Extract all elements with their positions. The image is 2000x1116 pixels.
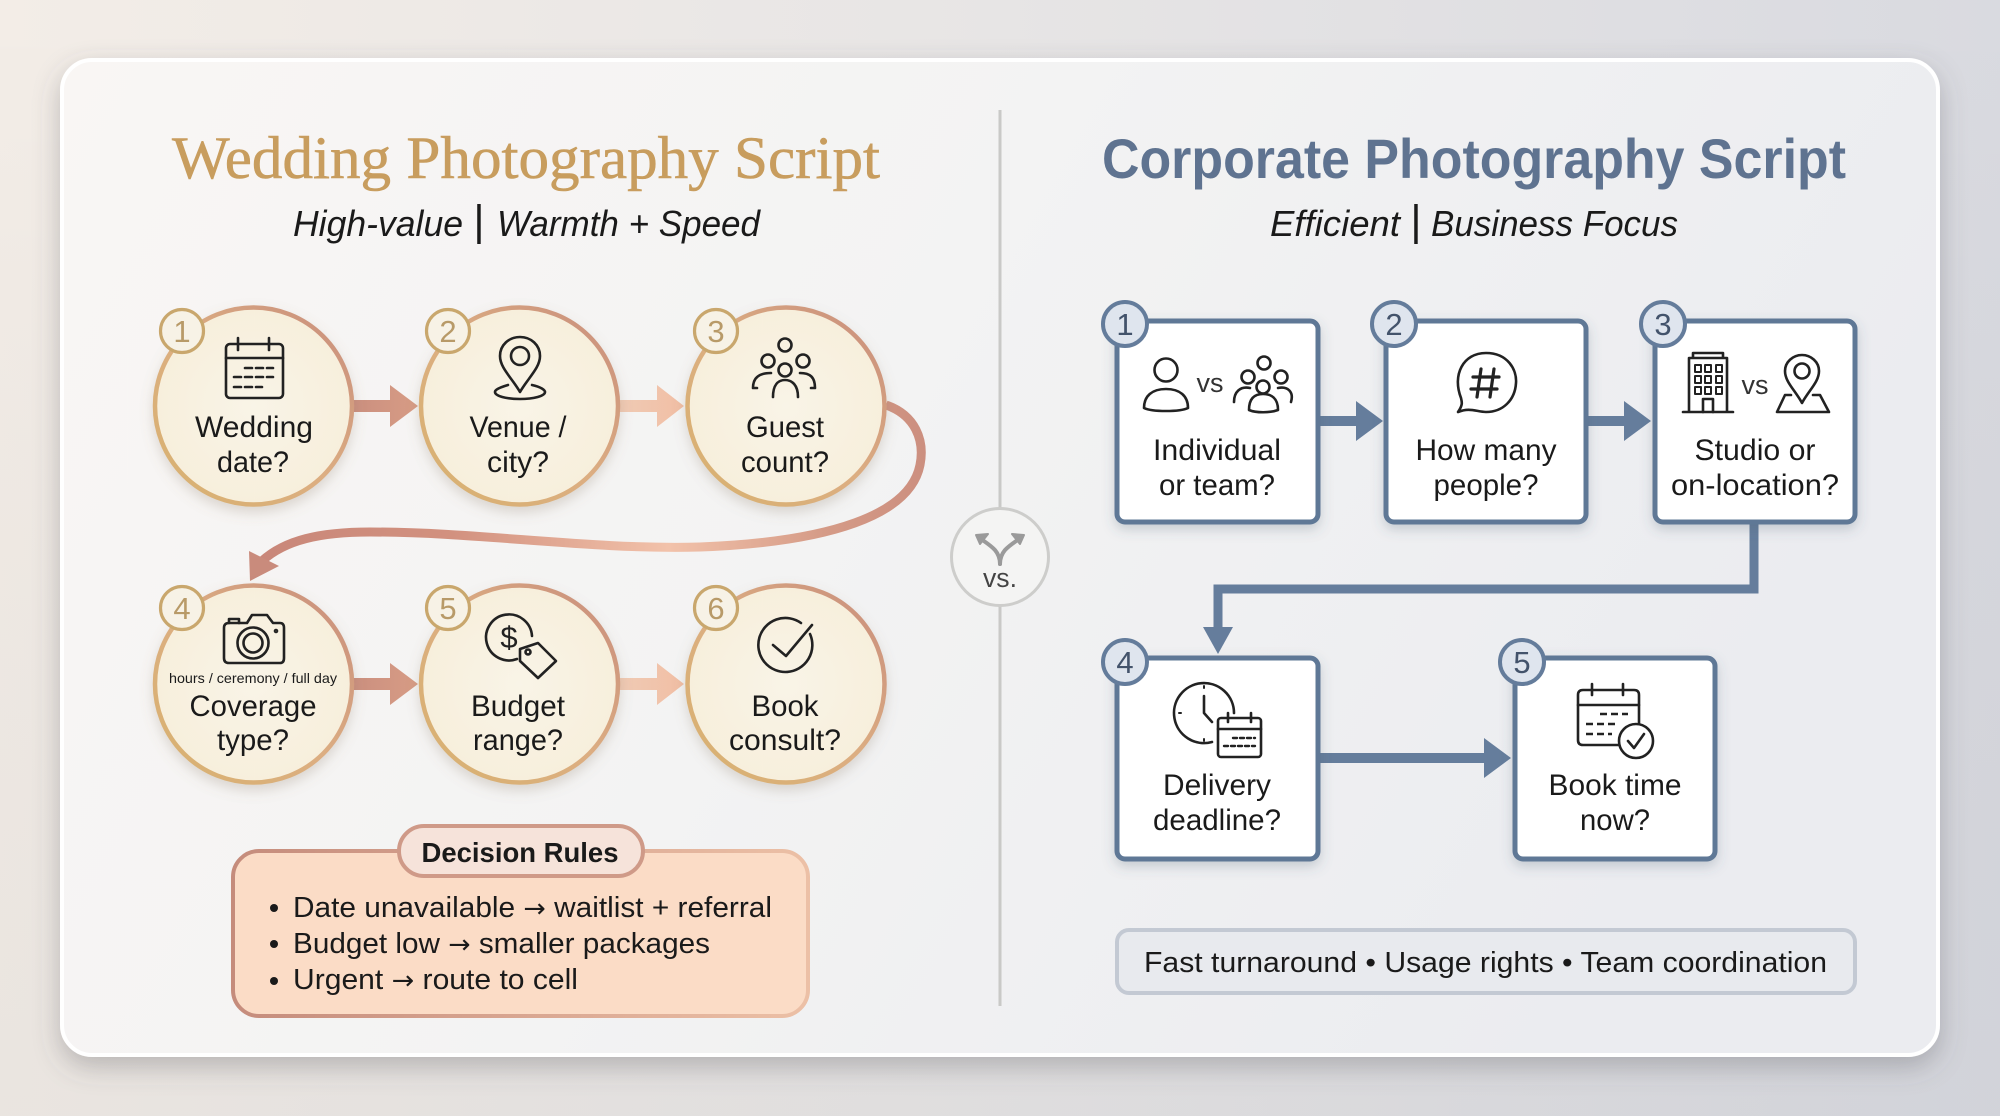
step 3: guest count: 3	[707, 314, 725, 349]
subtitle: wedding: |	[473, 197, 485, 245]
step 4: coverage type: type?	[217, 724, 289, 757]
box 4: delivery deadline: 4	[1116, 645, 1134, 680]
box 5: book time now	[1500, 640, 1715, 859]
step 6: book consult: Book	[752, 690, 819, 723]
step 3: guest count: Guest	[746, 411, 825, 444]
icon: camera	[224, 615, 284, 663]
step 2: venue: Venue /	[470, 411, 567, 444]
icon: group of people	[753, 338, 815, 397]
subtitle: corporate: Business Focus	[1431, 203, 1678, 244]
step 3: guest count	[688, 308, 884, 504]
step 6: book consult	[688, 586, 884, 782]
box 1: individual or team: or team?	[1159, 469, 1275, 502]
box 5: book time now: now?	[1580, 804, 1650, 837]
icon: calendar	[226, 338, 283, 398]
step 6: book consult: consult?	[729, 724, 841, 757]
arrow: box 2 to 3	[1587, 401, 1651, 441]
subtitle: wedding: Warmth + Speed	[497, 203, 761, 244]
box 2: how many people: 2	[1385, 307, 1403, 342]
step 1: wedding date: 1	[173, 314, 191, 349]
title: wedding: Wedding Photography Script	[172, 125, 880, 191]
title: corporate: Corporate Photography Script	[1102, 127, 1846, 190]
panel: corporate script	[1102, 127, 1855, 993]
step 4: coverage type: 4	[173, 591, 191, 626]
step 5: budget range	[421, 586, 618, 782]
arrow: step 2 to 3	[619, 385, 684, 427]
coverage note: hours / ceremony / full day	[169, 670, 337, 686]
subtitle: corporate	[1270, 197, 1678, 245]
center divider	[998, 110, 1002, 1006]
subtitle: wedding: High-value	[293, 203, 463, 244]
arrow: box 4 to 5	[1319, 738, 1511, 778]
step 1: wedding date: date?	[217, 446, 289, 479]
arrow: box 1 to 2	[1319, 401, 1383, 441]
icon: person vs team	[1144, 356, 1292, 412]
callout: decision rules	[233, 826, 808, 1016]
icon: check circle	[758, 618, 812, 672]
box 1: individual or team: Individual	[1153, 434, 1281, 467]
subtitle: corporate: Efficient	[1270, 203, 1402, 244]
box 3: studio or on-location: Studio or	[1694, 434, 1816, 467]
decision rules heading: Decision Rules	[422, 837, 618, 868]
vs badge	[952, 508, 1048, 606]
box 2: how many people: people?	[1434, 469, 1538, 502]
step 3: guest count: count?	[741, 446, 829, 479]
subtitle: wedding	[293, 197, 761, 245]
box 1: individual or team	[1103, 302, 1318, 522]
subtitle: corporate: |	[1410, 197, 1422, 245]
arrow: curved step 3 to 4	[249, 405, 921, 581]
step 4: coverage type	[155, 586, 352, 782]
arrow: step 5 to 6	[619, 663, 684, 705]
step 5: budget range: range?	[473, 724, 563, 757]
icon: calendar with check	[1578, 684, 1653, 758]
step 2: venue: 2	[439, 314, 457, 349]
arrow: step 1 to 2	[352, 385, 418, 427]
box 3: studio or on-location	[1641, 302, 1855, 522]
step 6: book consult: 6	[707, 591, 725, 626]
icon: diverging arrows	[976, 534, 1024, 564]
decision rules list: Date unavailable → waitlist + referral	[293, 892, 772, 924]
box 5: book time now: Book time	[1548, 769, 1682, 802]
icon: clock and calendar	[1174, 683, 1261, 757]
icon: dollar and tag: $	[500, 620, 518, 655]
icon: building vs map pin	[1683, 353, 1829, 412]
box 4: delivery deadline	[1103, 640, 1318, 859]
step 4: coverage type: Coverage	[190, 690, 316, 723]
box 3: studio or on-location: on-location?	[1671, 469, 1839, 502]
panel: wedding script	[155, 125, 921, 1016]
icon: building vs map pin: vs	[1742, 370, 1768, 400]
decision rules list: Urgent → route to cell	[293, 964, 578, 996]
callout: corporate priorities	[1117, 930, 1855, 993]
box 2: how many people	[1372, 302, 1586, 522]
icon: speech bubble hash	[1458, 353, 1516, 412]
step 2: venue: city?	[487, 446, 549, 479]
step 1: wedding date	[155, 308, 352, 504]
box 1: individual or team: 1	[1116, 307, 1134, 342]
box 5: book time now: 5	[1513, 645, 1531, 680]
step 5: budget range: Budget	[471, 690, 566, 723]
decision rules list: Budget low → smaller packages	[293, 928, 710, 960]
callout: corporate priorities: Fast turnaround • Usage rights • Team coordination	[1144, 947, 1827, 979]
arrow: step 4 to 5	[352, 663, 418, 705]
decision rules list	[270, 892, 772, 996]
step 2: venue	[421, 308, 618, 504]
box 4: delivery deadline: deadline?	[1153, 804, 1281, 837]
box 3: studio or on-location: 3	[1654, 307, 1672, 342]
box 2: how many people: How many	[1416, 434, 1556, 467]
arrow: box 3 down to 4	[1203, 523, 1754, 654]
icon: map pin	[495, 337, 545, 399]
decision rules heading	[399, 826, 643, 876]
step 5: budget range: 5	[439, 591, 457, 626]
icon: person vs team: vs	[1196, 368, 1224, 398]
icon: dollar and tag	[486, 614, 556, 678]
box 4: delivery deadline: Delivery	[1163, 769, 1271, 802]
vs label: vs.	[983, 563, 1017, 593]
step 1: wedding date: Wedding	[195, 411, 313, 444]
